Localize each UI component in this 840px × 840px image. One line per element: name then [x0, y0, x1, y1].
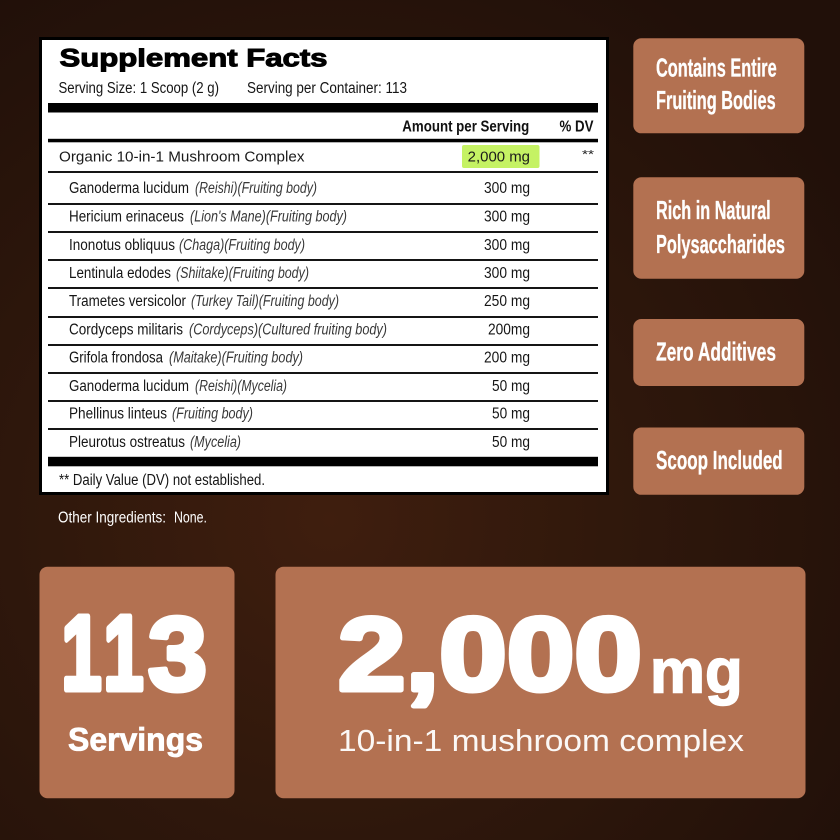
- row: Grifola frondosa: Grifola frondosa: [69, 350, 163, 367]
- highlight: 2,000 mg: [462, 145, 540, 168]
- callout: Rich in Natural Polysaccharides: [633, 177, 804, 279]
- row: Hericium erinaceus: Hericium erinaceus: [69, 209, 184, 226]
- row: Lentinula edodes: Lentinula edodes: [69, 265, 171, 282]
- row: total mushroom complex: **: [582, 148, 594, 162]
- row: Cordyceps militaris: 200mg: [488, 322, 530, 339]
- serving information: [58, 80, 407, 97]
- row: Grifola frondosa: 200 mg: [484, 350, 530, 367]
- footnote: ** Daily Value (DV) not established.: [59, 472, 265, 489]
- row: Hericium erinaceus: (Lion's Mane)(Fruiting body): [190, 209, 347, 226]
- row: Ganoderma lucidum fruiting body: [69, 180, 530, 197]
- callout: Rich in Natural Polysaccharides: Rich in Natural: [656, 195, 771, 225]
- row: Pleurotus ostreatus: (Mycelia): [190, 434, 241, 451]
- row: Trametes versicolor: Trametes versicolor: [69, 293, 186, 310]
- row: Trametes versicolor: (Turkey Tail)(Fruiting body): [191, 293, 339, 310]
- table column headers: Amount per Serving: [402, 119, 529, 136]
- row: Grifola frondosa: [69, 350, 530, 367]
- label: Servings: Servings: [68, 722, 203, 758]
- row: Ganoderma lucidum fruiting body: (Reishi)(Fruiting body): [195, 180, 317, 197]
- row: Pleurotus ostreatus: [69, 434, 530, 451]
- panel: supplement facts table: [39, 37, 609, 495]
- row: Hericium erinaceus: [69, 209, 530, 226]
- row: Pleurotus ostreatus: 50 mg: [492, 434, 530, 451]
- highlight: 2,000 mg: 2,000 mg: [468, 150, 530, 166]
- stat: 2,000: 2,000: [338, 597, 642, 713]
- row: Phellinus linteus: (Fruiting body): [172, 406, 253, 423]
- row: total mushroom complex: [59, 145, 594, 168]
- stat: 113: 1: [104, 595, 144, 713]
- row: Cordyceps militaris: (Cordyceps)(Cultured fruiting body): [189, 322, 387, 339]
- other ingredients note: None.: [174, 510, 207, 527]
- table column headers: % DV: [560, 119, 594, 136]
- serving information: Serving per Container: 113: [247, 80, 407, 97]
- row: Phellinus linteus: Phellinus linteus: [69, 406, 167, 423]
- panel: 113 servings: [40, 567, 234, 798]
- row: Phellinus linteus: 50 mg: [492, 406, 530, 423]
- row: Ganoderma lucidum mycelia: [69, 378, 530, 395]
- serving information: Serving Size: 1 Scoop (2 g): [58, 80, 219, 97]
- row: Grifola frondosa: (Maitake)(Fruiting body): [169, 350, 303, 367]
- row: Inonotus obliquus: 300 mg: [484, 237, 530, 254]
- callout: Scoop Included: [633, 428, 804, 495]
- row: Ganoderma lucidum mycelia: (Reishi)(Mycelia): [195, 378, 287, 395]
- row: Pleurotus ostreatus: Pleurotus ostreatus: [69, 434, 185, 451]
- row: Cordyceps militaris: [69, 322, 530, 339]
- row: Ganoderma lucidum mycelia: Ganoderma lucidum: [69, 378, 189, 395]
- row: Cordyceps militaris: Cordyceps militaris: [69, 322, 183, 339]
- callout: Contains Entire Fruiting Bodies: [633, 38, 804, 133]
- row: Inonotus obliquus: Inonotus obliquus: [69, 237, 175, 254]
- row: Inonotus obliquus: [69, 237, 530, 254]
- heading: Supplement Facts: Supplement Facts: [60, 45, 328, 73]
- row: Trametes versicolor: 250 mg: [484, 293, 530, 310]
- unit: mg: mg: [650, 638, 743, 707]
- row: Lentinula edodes: [69, 265, 530, 282]
- row: total mushroom complex: Organic 10-in-1 Mushroom Complex: [59, 150, 305, 166]
- row: Phellinus linteus: [69, 406, 530, 423]
- stat: 113: 1: [62, 595, 102, 713]
- row: Hericium erinaceus: 300 mg: [484, 209, 530, 226]
- row: Trametes versicolor: [69, 293, 530, 310]
- row: Inonotus obliquus: (Chaga)(Fruiting body): [179, 237, 305, 254]
- panel: 2,000 mg complex: [276, 567, 806, 798]
- row: Ganoderma lucidum fruiting body: 300 mg: [484, 180, 530, 197]
- callout: Zero Additives: [633, 319, 804, 386]
- row: Lentinula edodes: (Shiitake)(Fruiting body): [176, 265, 309, 282]
- callout: Zero Additives: Zero Additives: [656, 337, 776, 367]
- row: Ganoderma lucidum mycelia: 50 mg: [492, 378, 530, 395]
- row: Lentinula edodes: 300 mg: [484, 265, 530, 282]
- row: Ganoderma lucidum fruiting body: Ganoderma lucidum: [69, 180, 189, 197]
- label: 10-in-1 mushroom complex: 10-in-1 mushroom complex: [338, 723, 745, 758]
- stat: 113: 3: [148, 597, 207, 713]
- other ingredients note: Other Ingredients:: [58, 510, 166, 527]
